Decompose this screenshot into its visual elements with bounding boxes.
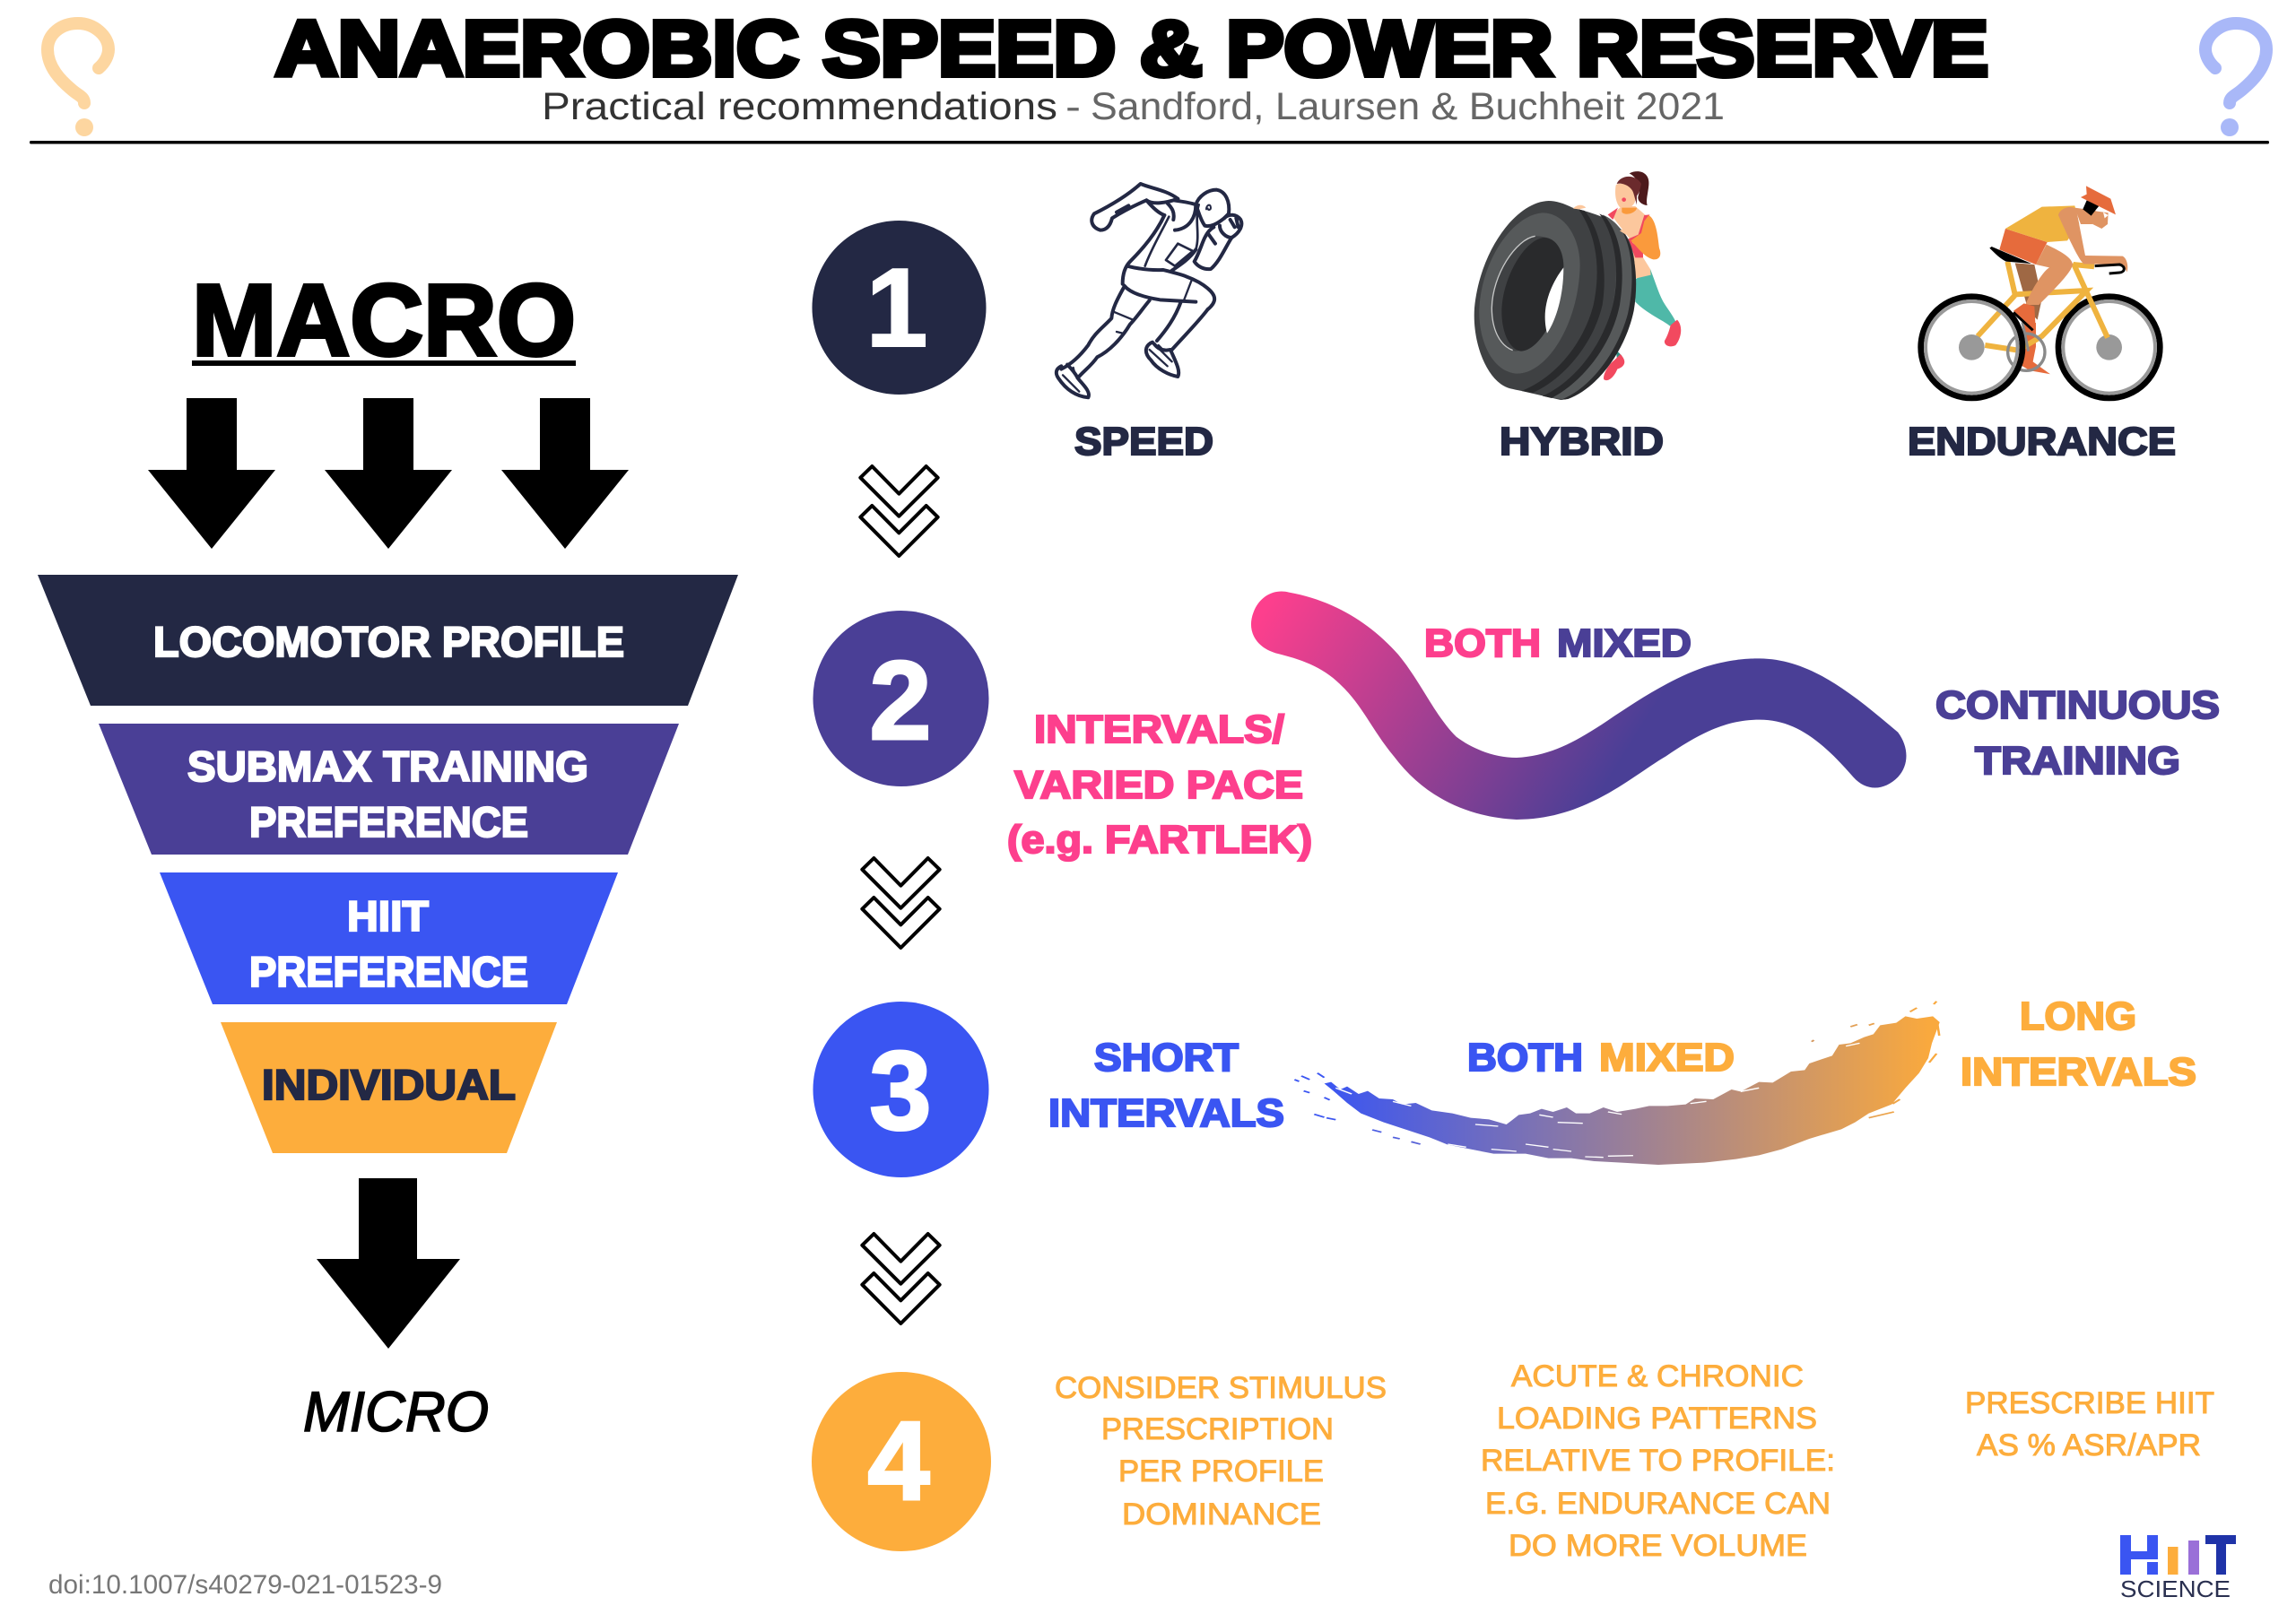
icon: right question mark: [2205, 23, 2266, 136]
funnel layer: submax training preference: [99, 724, 679, 855]
text block: loading patterns: RELATIVE TO PROFILE:: [1481, 1444, 1835, 1478]
logo: hiit science: SCIENCE: [2120, 1575, 2231, 1602]
funnel layer: hiit preference: HIIT: [347, 892, 429, 940]
step 2 badge: 2: [870, 639, 931, 763]
chevrons 1: [860, 466, 938, 556]
step 4 badge: 4: [868, 1400, 930, 1523]
label: short intervals: SHORT: [1094, 1036, 1239, 1080]
label: micro: MICRO: [303, 1381, 489, 1444]
label: long intervals: INTERVALS: [1961, 1050, 2196, 1094]
brush stroke: hiit gradient: [1294, 1002, 1940, 1165]
text block: stimulus prescription: DOMINANCE: [1122, 1497, 1321, 1532]
funnel layer: individual: [221, 1022, 557, 1153]
logo: hiit science: [2120, 1535, 2236, 1602]
label: continuous training: CONTINUOUS: [1935, 683, 2220, 727]
arrow: down 3: [501, 398, 629, 549]
label: long intervals: [1961, 994, 2196, 1094]
label: both mixed (hiit): BOTH: [1467, 1036, 1583, 1080]
icon: athlete flipping tyre: [1474, 171, 1681, 400]
text block: prescribe hiit: AS % ASR/APR: [1977, 1428, 2201, 1462]
funnel layer: hiit preference: [160, 872, 618, 1004]
text block: loading patterns: DO MORE VOLUME: [1509, 1529, 1807, 1563]
label: both mixed (submax): [1424, 621, 1692, 665]
label: both mixed (submax): BOTH: [1424, 621, 1541, 665]
arrow: big down: [317, 1178, 460, 1349]
label: intervals varied pace: INTERVALS/: [1034, 707, 1284, 751]
title: ANAEROBIC SPEED & POWER RESERVE: [275, 5, 1988, 92]
text block: stimulus prescription: PER PROFILE: [1118, 1454, 1324, 1488]
subtitle: [542, 85, 1725, 128]
text block: stimulus prescription: PRESCRIPTION: [1101, 1412, 1334, 1446]
step 4 badge: [812, 1372, 991, 1551]
text block: loading patterns: E.G. ENDURANCE CAN: [1485, 1487, 1831, 1521]
label: both mixed (submax): MIXED: [1557, 621, 1692, 665]
subtitle: Practical recommendations: [542, 85, 1057, 128]
label: both mixed (hiit): MIXED: [1599, 1036, 1735, 1080]
step 3 badge: 3: [870, 1029, 931, 1153]
label: endurance: ENDURANCE: [1908, 420, 2176, 464]
panel: macro to micro funnel: [38, 264, 738, 1600]
text block: stimulus prescription: CONSIDER STIMULUS: [1055, 1371, 1387, 1405]
funnel layer: individual: INDIVIDUAL: [262, 1061, 516, 1108]
label: intervals varied pace: (e.g. FARTLEK): [1007, 818, 1312, 862]
label: both mixed (hiit): [1467, 1036, 1735, 1080]
subtitle: -: [1065, 85, 1081, 128]
label: short intervals: [1048, 1036, 1284, 1135]
heading: macro: MACRO: [192, 264, 576, 377]
wave: submax gradient stroke: [1251, 592, 1906, 820]
icon: left question mark: [48, 23, 109, 136]
text block: prescribe hiit: PRESCRIBE HIIT: [1965, 1386, 2214, 1420]
label: short intervals: INTERVALS: [1048, 1091, 1284, 1135]
chevrons 2: [862, 858, 940, 948]
chevrons 3: [862, 1234, 940, 1324]
arrow: down 1: [148, 398, 275, 549]
label: hybrid: HYBRID: [1500, 420, 1664, 464]
icon: sprinter: [1057, 184, 1241, 397]
subtitle: Sandford, Laursen & Buchheit 2021: [1091, 85, 1725, 128]
funnel layer: hiit preference: PREFERENCE: [249, 948, 528, 995]
funnel layer: submax training preference: PREFERENCE: [249, 798, 528, 846]
icon: cyclist: [1921, 186, 2160, 398]
step 2 badge: [813, 611, 988, 786]
funnel layer: locomotor profile: LOCOMOTOR PROFILE: [153, 618, 624, 665]
step 1 badge: [813, 221, 987, 395]
funnel layer: submax training preference: SUBMAX TRAINING: [187, 742, 588, 790]
label: continuous training: [1935, 683, 2220, 783]
label: continuous training: TRAINING: [1975, 739, 2180, 783]
label: intervals varied pace: VARIED PACE: [1014, 763, 1303, 807]
doi: doi:10.1007/s40279-021-01523-9: [48, 1570, 442, 1600]
step 3 badge: [813, 1002, 988, 1177]
label: intervals varied pace: [1007, 707, 1312, 862]
arrow: down 2: [325, 398, 452, 549]
funnel layer: locomotor profile: [38, 575, 738, 706]
text block: loading patterns: [1481, 1359, 1835, 1563]
label: long intervals: LONG: [2020, 994, 2136, 1038]
text block: stimulus prescription: [1055, 1371, 1387, 1532]
text block: prescribe hiit: [1965, 1386, 2214, 1462]
header: [30, 5, 2269, 143]
label: speed: SPEED: [1074, 420, 1213, 464]
text block: loading patterns: LOADING PATTERNS: [1497, 1402, 1817, 1436]
step 1 badge: 1: [866, 247, 927, 370]
text block: loading patterns: ACUTE & CHRONIC: [1511, 1359, 1804, 1393]
